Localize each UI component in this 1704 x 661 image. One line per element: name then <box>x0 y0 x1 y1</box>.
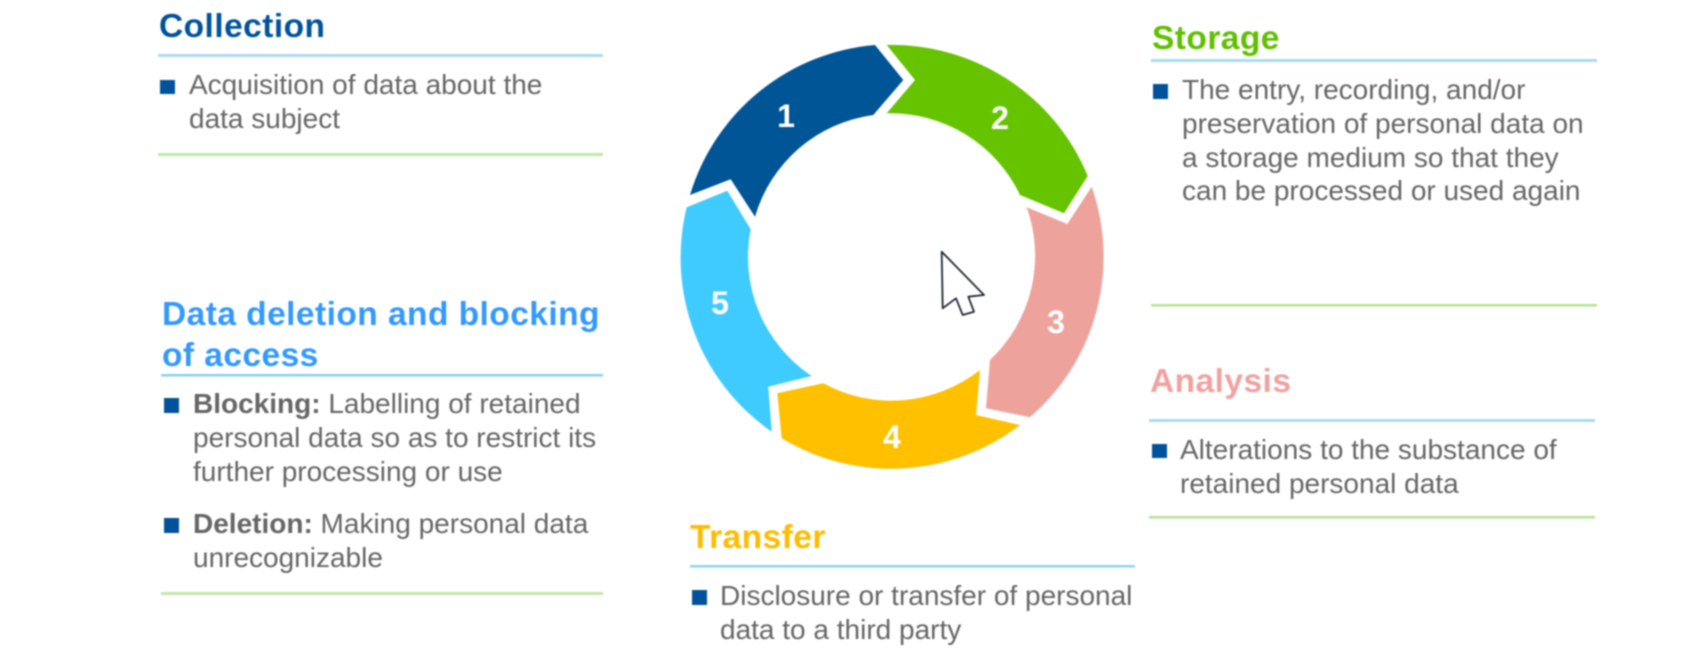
arrow segment 5: data deletion <box>681 191 812 432</box>
text: blocking: Blocking: <box>193 388 321 419</box>
text: analysis description: retained personal data <box>1180 468 1459 499</box>
arrow segment 4: transfer: 4 <box>883 419 901 455</box>
text: deletion: Making personal data <box>313 508 589 539</box>
text: collection description: data subject <box>189 103 340 134</box>
arrow segment 4: transfer <box>777 370 1020 469</box>
bullet: analysis <box>1152 444 1167 458</box>
panel: analysis <box>1149 363 1595 518</box>
panel: storage <box>1151 20 1597 306</box>
panel: data deletion and blocking <box>161 296 603 595</box>
cycle diagram <box>681 45 1104 469</box>
heading: transfer: Transfer <box>690 519 826 556</box>
arrow segment 3: analysis <box>986 187 1104 417</box>
arrow segment 2: storage: 2 <box>991 100 1009 136</box>
text: storage description: preservation of personal data on <box>1182 108 1584 139</box>
bullet: blocking <box>164 398 179 413</box>
heading: collection: Collection <box>159 8 325 45</box>
arrow segment 1: collection <box>690 45 903 217</box>
text: blocking: Labelling of retained <box>321 388 581 419</box>
text: storage description: a storage medium so that they <box>1182 142 1559 173</box>
text: deletion: unrecognizable <box>193 542 383 573</box>
heading: data deletion and blocking of access: of access <box>162 337 319 374</box>
text: blocking: further processing or use <box>193 456 503 487</box>
panel: collection <box>158 8 603 156</box>
heading: data deletion and blocking of access: Data deletion and blocking <box>162 296 600 333</box>
arrow segment 3: analysis: 3 <box>1047 304 1065 340</box>
arrow segment 1: collection: 1 <box>777 98 795 134</box>
text: storage description: can be processed or used again <box>1182 175 1580 206</box>
bullet: storage <box>1153 84 1168 99</box>
text: collection description: Acquisition of data about the <box>189 69 542 100</box>
panel: transfer <box>690 519 1135 645</box>
text: blocking: personal data so as to restrict its <box>193 422 596 453</box>
text: deletion: Deletion: <box>193 508 313 539</box>
heading: analysis: Analysis <box>1150 363 1291 400</box>
heading: storage: Storage <box>1152 20 1280 57</box>
bullet: transfer <box>692 590 707 605</box>
arrow segment 2: storage <box>887 45 1088 213</box>
icon: mouse cursor <box>942 252 984 315</box>
text: storage description: The entry, recording, and/or <box>1182 74 1525 105</box>
text: transfer description: Disclosure or transfer of personal <box>720 580 1132 611</box>
bullet: collection <box>160 80 175 94</box>
arrow segment 5: data deletion: 5 <box>711 285 729 321</box>
bullet: deletion <box>164 518 179 533</box>
text: transfer description: data to a third party <box>720 614 961 645</box>
text: analysis description: Alterations to the substance of <box>1180 434 1557 465</box>
